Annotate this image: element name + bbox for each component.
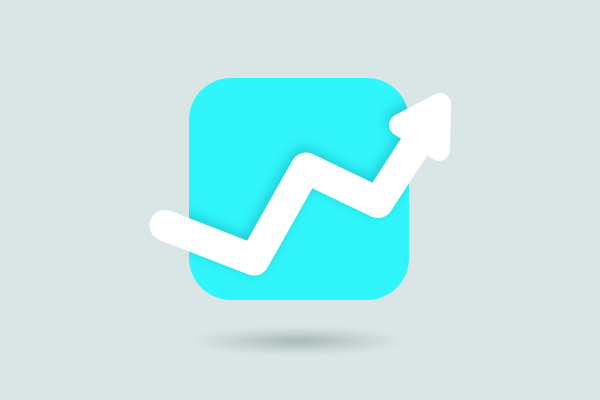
rounded square tile	[189, 78, 409, 300]
arrow shadow on tile	[163, 100, 438, 256]
arrow head	[400, 104, 440, 150]
arrow line	[165, 138, 420, 260]
rising white arrow	[165, 104, 440, 260]
floor shadow	[190, 327, 406, 355]
infographic: rising arrow icon	[150, 78, 451, 353]
